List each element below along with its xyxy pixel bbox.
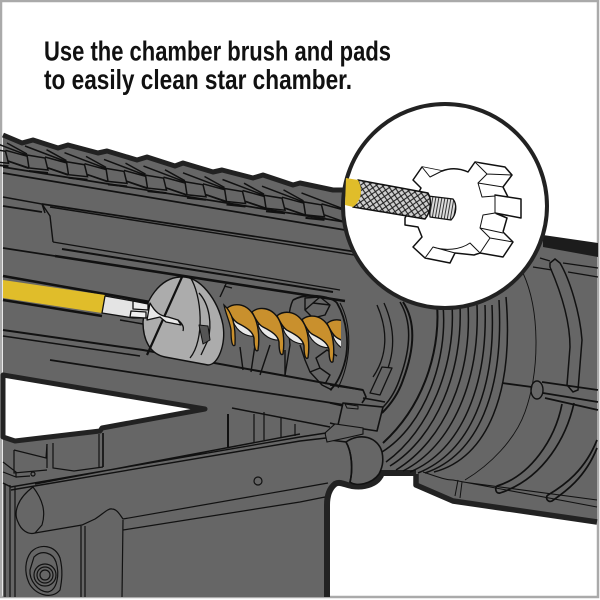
bolt carrier spiral <box>223 303 341 363</box>
brush head <box>102 296 183 331</box>
title: to easily clean star chamber. <box>44 64 352 95</box>
white gap between receivers <box>3 375 205 441</box>
star chamber disc <box>143 277 224 365</box>
rifle silhouette <box>3 135 597 597</box>
buffer tube ribs <box>373 297 507 473</box>
lower receiver lines <box>3 412 328 597</box>
stock right section <box>423 258 598 507</box>
title <box>44 36 391 95</box>
bolt carrier interior <box>240 296 349 390</box>
magnifier callout <box>343 104 547 308</box>
title: Use the chamber brush and pads <box>44 36 391 66</box>
bolt catch block <box>330 367 392 431</box>
star chamber detail <box>405 162 521 263</box>
rifle outer outline <box>3 135 598 597</box>
pivot pin ball <box>325 424 383 484</box>
chamber brush rod <box>3 280 105 313</box>
picatinny rail teeth <box>0 136 344 222</box>
upper receiver lines <box>3 167 370 427</box>
mini brush <box>345 178 456 220</box>
